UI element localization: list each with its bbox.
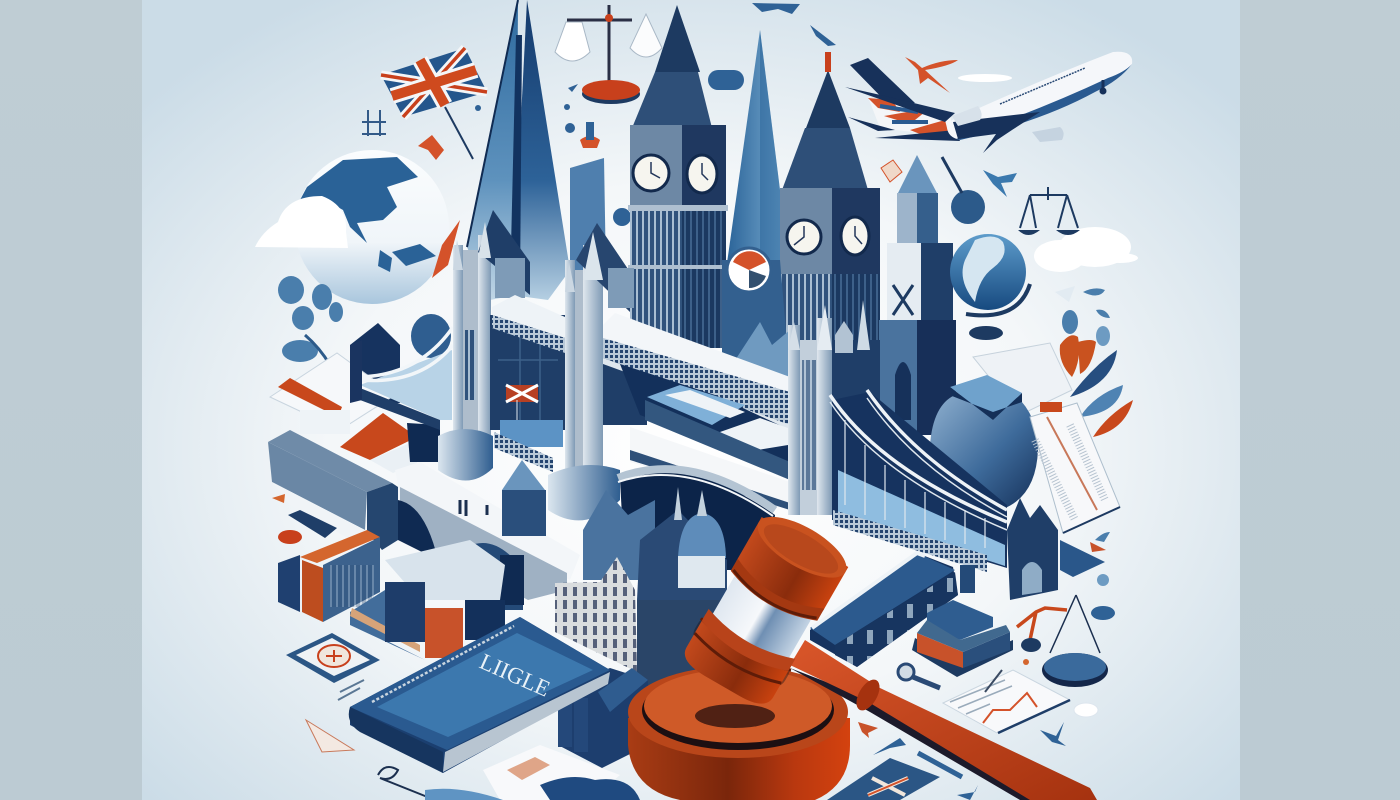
building: Big Ben right [780, 52, 880, 444]
building: book stacks left [278, 530, 380, 622]
icon: low right book stack [912, 600, 1013, 677]
icon: large left globe [255, 150, 460, 304]
building: small rear tower [570, 158, 606, 285]
icon: small aeroplanes and marks at top [362, 3, 836, 226]
building: central lower decks [620, 364, 790, 510]
building: central townhouses [555, 487, 727, 690]
building: river-front hall [810, 553, 958, 667]
icon: chart document [943, 670, 1070, 733]
icon: gavel head [677, 504, 857, 712]
right side panel [1240, 0, 1400, 800]
building: the Shard centre [726, 30, 790, 270]
icon: lower right scales [1017, 595, 1115, 687]
building: Big Ben left [628, 5, 728, 348]
central background [142, 0, 1240, 800]
icon: right scales of justice [1018, 187, 1080, 235]
building: small gatehouse right [1007, 498, 1105, 600]
icon: world map bottom [540, 777, 640, 800]
icon: legal document right [1030, 402, 1120, 533]
icon: small plaque left [286, 633, 380, 683]
building: stacked books centre left [350, 540, 505, 660]
building: Tower Bridge left tower [453, 210, 565, 440]
building: orange roof house [340, 413, 440, 473]
icon: small flag on bridge [506, 385, 538, 425]
building: upper walkway left section [492, 295, 565, 353]
building: small pavilion on pavement [502, 460, 546, 536]
icon: notepad bottom [483, 745, 620, 800]
building: navy arch bay behind town [618, 469, 775, 570]
icon: gavel sound block [628, 666, 850, 800]
building: left white terrace with orange slab [270, 353, 395, 434]
icon: magnifier [898, 664, 940, 688]
icon: blue globe right [950, 234, 1030, 340]
building: ornate right tower [879, 155, 956, 435]
building: the Shard left [467, 0, 570, 300]
icon: gavel handle [790, 640, 1097, 800]
building: dome behind left [350, 314, 451, 403]
building: long left hall [268, 430, 398, 550]
icon: small desk marks left [272, 494, 364, 752]
icon: right foliage and papers [973, 286, 1133, 437]
icon: small orange aeroplane [905, 57, 958, 93]
icon: top scales of justice [555, 5, 662, 104]
book title: LIIGLE [476, 649, 554, 702]
icon: large blue legal book [349, 617, 610, 773]
icon: small lower marks [858, 532, 1110, 800]
icon: left foliage [278, 276, 343, 365]
icon: flag card bottom [827, 758, 940, 800]
building: suspension span left [350, 327, 453, 430]
building: lower deck and drums left [438, 420, 620, 520]
icon: union flag [381, 48, 487, 159]
icon: cloud top right [958, 74, 1138, 272]
icon: blue aeroplane and pin dial [881, 157, 1017, 224]
building: Tower Bridge right tower [788, 300, 880, 520]
building: central upper walkway [603, 313, 790, 432]
left side panel [0, 0, 142, 800]
icon: orange medallion [727, 248, 771, 292]
building: stone arch bridge left [395, 462, 580, 610]
icon: cord and blue shape bottom [378, 767, 503, 800]
icon: airliner [845, 52, 1132, 153]
building: right suspension bridge [830, 390, 1007, 593]
building: mid blue facade with roof peaks [722, 260, 795, 380]
building: stone globe dome right [930, 375, 1038, 510]
icon: upright volumes beside book [558, 668, 648, 768]
building: Tower Bridge centre tower [565, 223, 647, 470]
